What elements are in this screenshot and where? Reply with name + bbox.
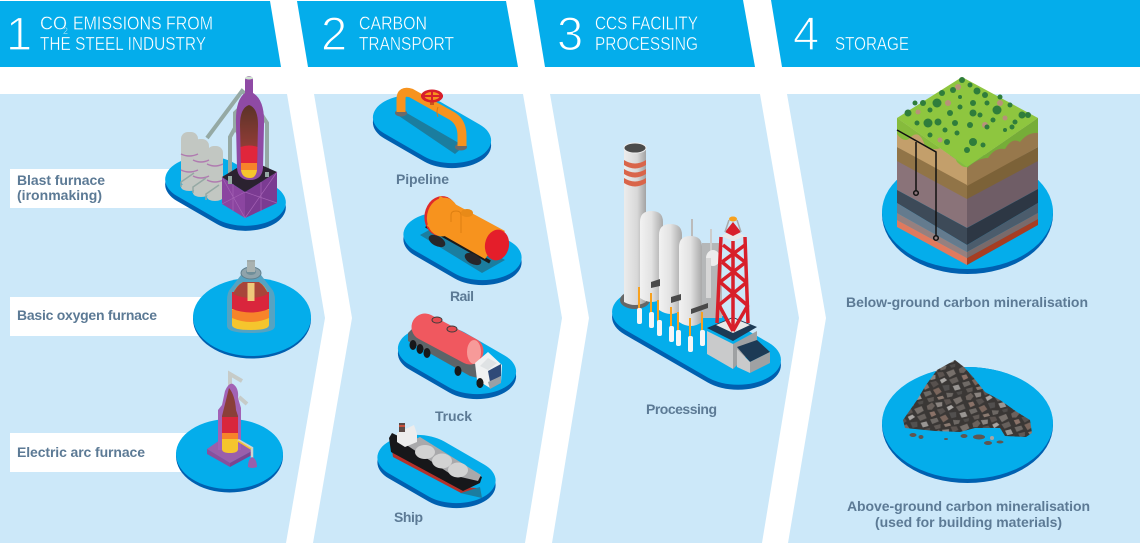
- header 1: CO2 emissions from the steel industry: EMISSIONS FROM: [73, 14, 213, 34]
- header 1: CO2 emissions from the steel industry: 1: [6, 7, 32, 60]
- header 1: CO2 emissions from the steel industry: CO: [40, 14, 67, 34]
- grass top: [897, 77, 1038, 167]
- icon: pipeline: [357, 86, 507, 178]
- header 1: CO2 emissions from the steel industry: [0, 1, 281, 67]
- label: below-ground carbon mineralisation: Below-ground carbon mineralisation: [846, 294, 1088, 310]
- header 3: CCS facility processing: CCS FACILITY: [595, 14, 698, 34]
- header 3: CCS facility processing: [534, 0, 755, 67]
- icon: above-ground rock pile: [882, 360, 1053, 483]
- label box: electric arc furnace: Electric arc furnace: [17, 444, 145, 460]
- header 2: carbon transport: 2: [321, 7, 347, 60]
- header 3: CCS facility processing: PROCESSING: [595, 34, 698, 54]
- label: truck: Truck: [435, 408, 472, 424]
- left and right face strata: [897, 118, 1038, 265]
- icon: electric arc furnace: [176, 374, 283, 492]
- header 4: storage: STORAGE: [835, 34, 909, 54]
- label: processing: Processing: [646, 401, 717, 417]
- label box: blast furnace: (ironmaking): [17, 187, 102, 203]
- header 4: storage: [771, 0, 1140, 67]
- panel: storage: [787, 94, 1140, 543]
- panel: processing: [550, 94, 799, 543]
- label: rail: Rail: [450, 288, 474, 304]
- header 4: storage: 4: [793, 7, 819, 60]
- label box: basic oxygen furnace: Basic oxygen furnace: [17, 307, 157, 323]
- panel: transport: [313, 94, 562, 543]
- header 1: CO2 emissions from the steel industry: 2: [63, 26, 68, 36]
- label: above-ground carbon mineralisation: (used for building materials): [875, 514, 1062, 530]
- wells: [897, 130, 938, 240]
- label box: blast furnace: [10, 169, 200, 208]
- header 2: carbon transport: [297, 1, 518, 67]
- icon: basic oxygen furnace: [193, 260, 311, 358]
- label: ship: Ship: [394, 509, 423, 525]
- icon: tanker truck: [382, 316, 532, 408]
- header 3: CCS facility processing: 3: [557, 7, 583, 60]
- label box: blast furnace: Blast furnace: [17, 172, 105, 188]
- label box: basic oxygen furnace: [10, 297, 205, 336]
- label: pipeline: Pipeline: [396, 171, 449, 187]
- icon: below-ground storage block: [882, 77, 1053, 274]
- icon: blast furnace: [148, 76, 303, 240]
- label: above-ground carbon mineralisation: Above-ground carbon mineralisation: [847, 498, 1090, 514]
- header 1: CO2 emissions from the steel industry: THE STEEL INDUSTRY: [40, 34, 206, 54]
- icon: rail tank wagon: [387, 193, 538, 294]
- icon: ship: [361, 423, 512, 518]
- label box: electric arc furnace: [10, 433, 190, 472]
- label: above-ground carbon mineralisation: [847, 498, 1090, 530]
- panel: emissions: [0, 94, 325, 543]
- header 2: carbon transport: TRANSPORT: [359, 34, 454, 54]
- header 2: carbon transport: CARBON: [359, 14, 427, 34]
- icon: CCS processing facility: [594, 143, 799, 400]
